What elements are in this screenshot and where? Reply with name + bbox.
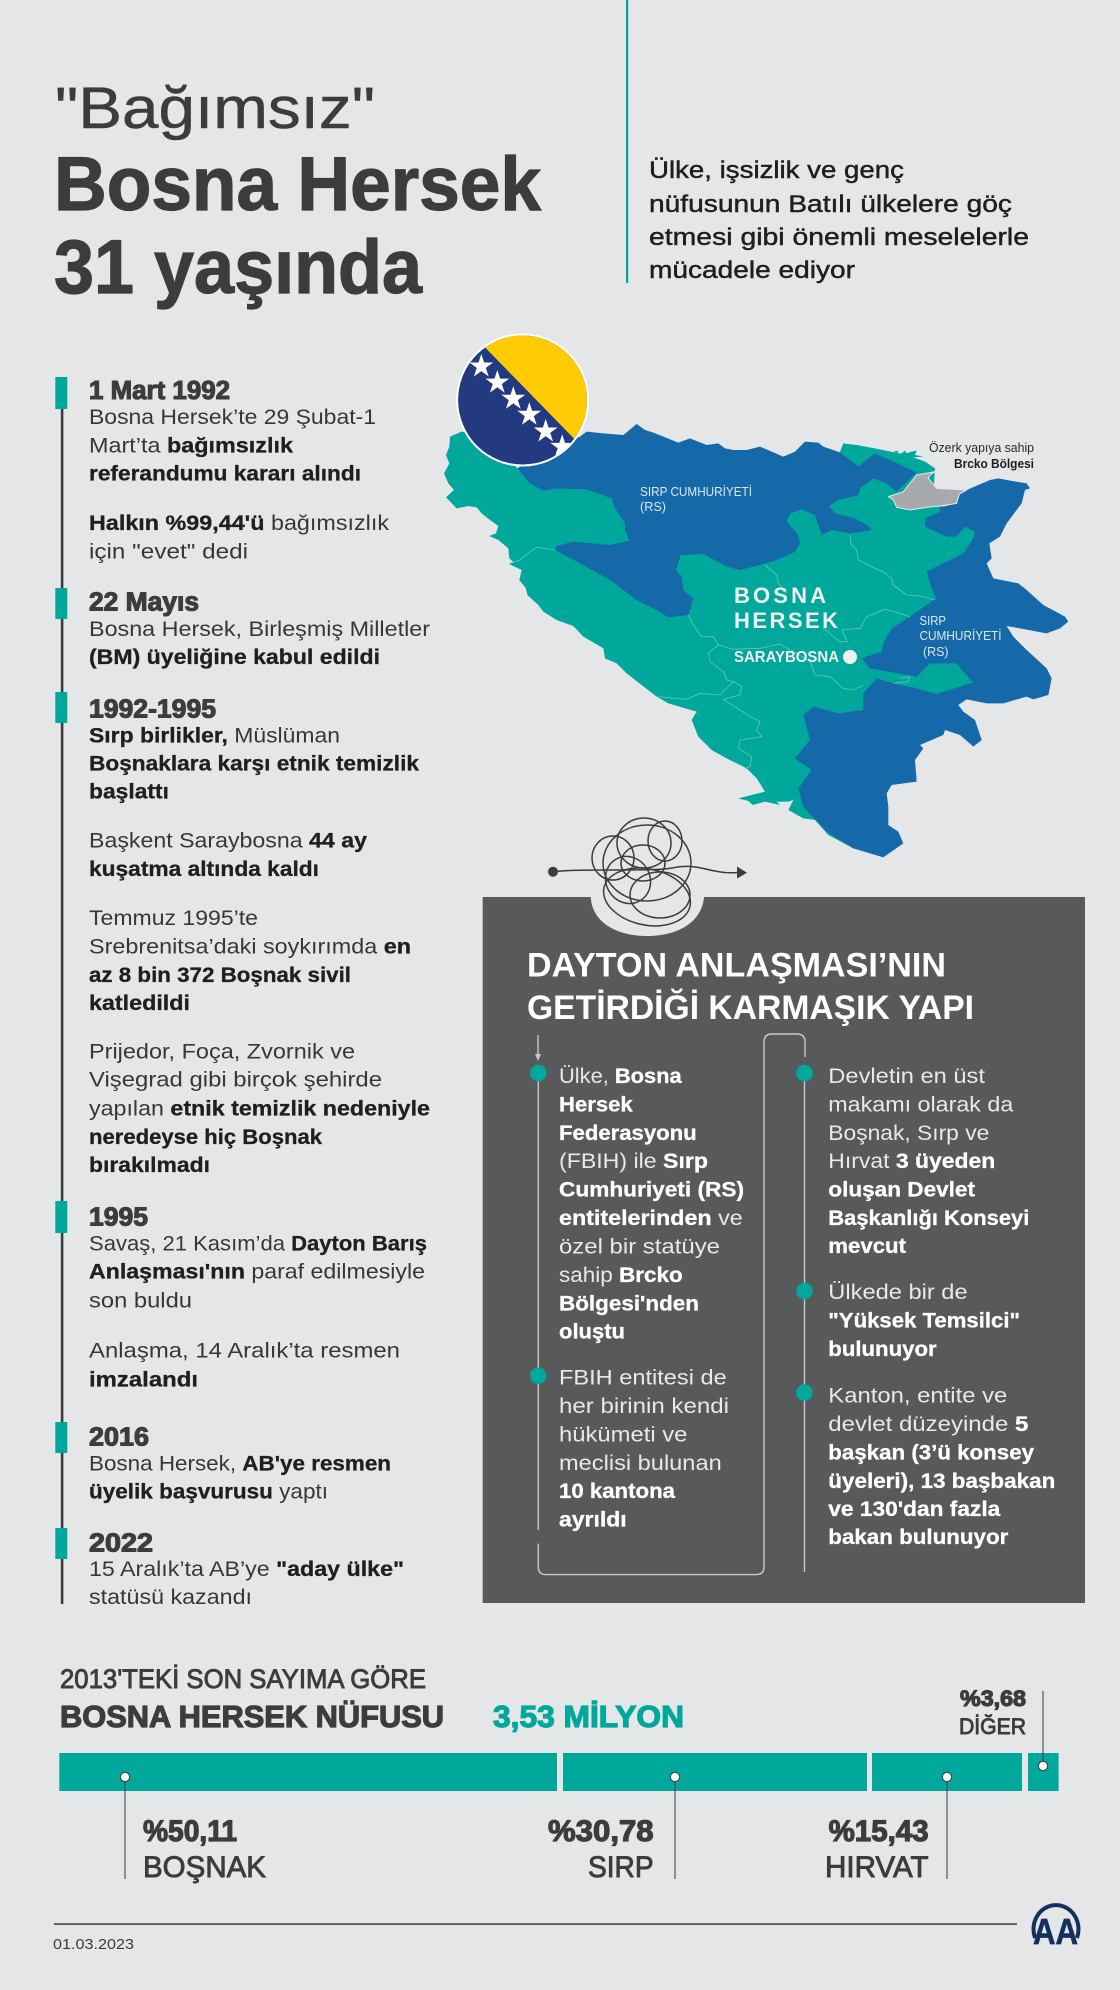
- entry: 1992-1995: Prijedor, Foça, Zvornik ve: [89, 1040, 355, 1064]
- panel: Dayton agreement: [483, 818, 1085, 1603]
- timeline marker 2016: [55, 1422, 67, 1453]
- timeline marker 22 Mayıs: [55, 588, 67, 619]
- icon: Bosnian flag: [455, 332, 591, 468]
- label: Diğer: %3,68: [960, 1686, 1026, 1711]
- panel text: presidency: Hırvat 3 üyeden: [828, 1150, 995, 1173]
- panel text: entities: özel bir statüye: [559, 1236, 720, 1258]
- population total: 3,53 MİLYON: [493, 1699, 684, 1734]
- entry: 1995: Anlaşması'nın paraf edilmesiyle: [89, 1260, 425, 1284]
- entry: 1 Mart 1992: Bosna Hersek’te 29 Şubat-1: [89, 405, 376, 429]
- entry: 2022: [89, 1530, 404, 1609]
- timeline marker 1992-1995: [55, 692, 67, 723]
- entry: 1992-1995: [89, 695, 430, 1177]
- panel text: presidency: oluşan Devlet: [828, 1179, 975, 1202]
- leader lines and dots: [120, 1691, 1048, 1879]
- entry: 22 Mayıs: (BM) üyeliğine kabul edildi: [89, 645, 380, 669]
- label: Boşnak: [143, 1815, 266, 1884]
- icon: tangled line with arrow: [548, 818, 747, 934]
- entry: 2016: 2016: [89, 1423, 149, 1451]
- entry: 1992-1995: Temmuz 1995’te: [89, 906, 258, 930]
- entry: 1992-1995: katledildi: [89, 991, 190, 1015]
- entry: 2016: Bosna Hersek, AB'ye resmen: [89, 1452, 391, 1476]
- panel text: entities: sahip Brcko: [559, 1264, 683, 1287]
- panel text: presidency: Başkanlığı Konseyi: [828, 1207, 1029, 1230]
- label: Hırvat: [825, 1815, 929, 1884]
- panel text: cantons: hükümeti ve: [559, 1423, 687, 1446]
- entry: 1992-1995: neredeyse hiç Boşnak: [89, 1125, 322, 1149]
- title: "Bağımsız": [55, 76, 375, 141]
- panel text: officials: [828, 1384, 1055, 1549]
- entry: 2022: statüsü kazandı: [89, 1585, 252, 1609]
- panel text: presidency: Boşnak, Sırp ve: [828, 1122, 989, 1145]
- panel text: officials: üyeleri), 13 başbakan: [828, 1470, 1055, 1493]
- map label: Saraybosna with dot: SARAYBOSNA: [734, 649, 839, 666]
- panel heading: GETİRDİĞİ KARMAŞIK YAPI: [527, 989, 974, 1027]
- entry: 1 Mart 1992: Mart’ta bağımsızlık: [89, 434, 293, 458]
- panel text: presidency: [828, 1065, 1029, 1258]
- entry: 1 Mart 1992: Halkın %99,44'ü bağımsızlık: [89, 511, 389, 535]
- panel text: entities: entitelerinden ve: [559, 1207, 743, 1230]
- label: Boşnak: BOŞNAK: [143, 1851, 266, 1884]
- entry: 2022: 15 Aralık’ta AB’ye "aday ülke": [89, 1557, 404, 1581]
- timeline marker 1995: [55, 1201, 67, 1233]
- small coastal details: [893, 451, 923, 457]
- label: Sırp: %30,78: [548, 1815, 654, 1848]
- panel text: cantons: meclisi bulunan: [559, 1452, 722, 1475]
- entry: 1992-1995: bırakılmadı: [89, 1153, 210, 1177]
- subtitle text block: mücadele ediyor: [649, 257, 855, 284]
- panel text: officials: devlet düzeyinde 5: [828, 1413, 1029, 1436]
- subtitle text block: Ülke, işsizlik ve genç: [649, 157, 904, 184]
- entry: 1992-1995: Boşnaklara karşı etnik temizlik: [89, 752, 419, 776]
- entry: 2016: üyelik başvurusu yaptı: [89, 1480, 328, 1504]
- panel heading: DAYTON ANLAŞMASI’NIN: [527, 947, 946, 985]
- map label: Sırp Cumhuriyeti east: [920, 613, 1002, 659]
- flow connector lines: [535, 1034, 805, 1575]
- map label: Brcko Bölgesi: Özerk yapıya sahip: [929, 441, 1034, 455]
- panel text: officials: ve 130'dan fazla: [828, 1498, 1001, 1521]
- panel text: officials: Kanton, entite ve: [828, 1384, 1007, 1408]
- panel text: presidency: Devletin en üst: [828, 1065, 985, 1088]
- panel text: presidency: mevcut: [828, 1235, 906, 1258]
- timeline marker 2022: [55, 1528, 67, 1559]
- map label: Sırp Cumhuriyeti west: SIRP CUMHURİYETİ: [640, 484, 752, 499]
- panel text: entities: (FBIH) ile Sırp: [559, 1150, 708, 1173]
- map label: Sırp Cumhuriyeti east: (RS): [923, 644, 948, 659]
- entry: 1995: [89, 1203, 427, 1392]
- entry: 1 Mart 1992: [89, 377, 389, 563]
- teal bullet dots: [530, 1065, 813, 1401]
- entry: 22 Mayıs: [89, 589, 430, 669]
- title: 31 yaşında: [54, 225, 423, 310]
- label: Boşnak: %50,11: [143, 1815, 237, 1848]
- teal vertical rule: [626, 0, 628, 283]
- panel text: entities: Cumhuriyeti (RS): [559, 1179, 744, 1202]
- entry: 1992-1995: 1992-1995: [89, 695, 216, 723]
- population heading: [60, 1663, 444, 1734]
- panel text: cantons: FBIH entitesi de: [559, 1367, 727, 1390]
- date: 01.03.2023: [53, 1936, 134, 1953]
- panel text: officials: bakan bulunuyor: [828, 1526, 1008, 1549]
- timeline: [55, 377, 430, 1609]
- entry: 1995: Savaş, 21 Kasım’da Dayton Barış: [89, 1232, 427, 1256]
- title: Bosna Hersek: [54, 142, 542, 227]
- entry: 1992-1995: Başkent Saraybosna 44 ay: [89, 828, 367, 852]
- entry: 1 Mart 1992: için "evet" dedi: [89, 539, 248, 563]
- panel text: cantons: [559, 1367, 729, 1531]
- map label: Brcko Bölgesi: Brcko Bölgesi: [954, 457, 1034, 471]
- map label: Bosna Hersek: HERSEK: [734, 608, 838, 633]
- label: Sırp: SIRP: [588, 1851, 654, 1884]
- entry: 1992-1995: az 8 bin 372 Boşnak sivil: [89, 963, 351, 987]
- entry: 1995: Anlaşma, 14 Aralık’ta resmen: [89, 1338, 400, 1362]
- map label: Sırp Cumhuriyeti west: [640, 484, 752, 514]
- map label: Sırp Cumhuriyeti west: (RS): [640, 499, 666, 514]
- map label: Brcko Bölgesi: [929, 441, 1034, 471]
- panel text: officials: başkan (3’ü konsey: [828, 1442, 1034, 1465]
- panel text: high representative: "Yüksek Temsilci": [828, 1310, 1020, 1332]
- entry: 1992-1995: yapılan etnik temizlik nedeniyle: [89, 1096, 430, 1120]
- panel text: cantons: her birinin kendi: [559, 1395, 729, 1418]
- panel text: high representative: bulunuyor: [828, 1338, 937, 1361]
- panel text: high representative: Ülkede bir de: [828, 1281, 968, 1304]
- label: Hırvat: HIRVAT: [825, 1851, 929, 1884]
- title: [54, 76, 542, 310]
- panel text: high representative: [828, 1281, 1020, 1361]
- entry: 1992-1995: Sırp birlikler, Müslüman: [89, 724, 340, 748]
- panel text: entities: [559, 1065, 744, 1344]
- subtitle text block: etmesi gibi önemli meselelerle: [649, 224, 1029, 251]
- map of Bosnia and Herzegovina: [444, 424, 1068, 857]
- population section: [59, 1663, 1059, 1884]
- entry: 1995: imzalandı: [89, 1368, 198, 1392]
- entry: 2016: [89, 1423, 391, 1504]
- panel text: entities: Hersek: [559, 1093, 633, 1116]
- map label: Sırp Cumhuriyeti east: CUMHURİYETİ: [920, 628, 1002, 643]
- panel text: cantons: 10 kantona: [559, 1480, 675, 1503]
- panel text: presidency: makamı olarak da: [828, 1093, 1014, 1116]
- entry: 22 Mayıs: 22 Mayıs: [89, 589, 199, 617]
- subtitle text block: nüfusunun Batılı ülkelere göç: [649, 191, 1012, 218]
- label: Sırp: [548, 1815, 654, 1884]
- subtitle text block: [649, 157, 1029, 284]
- map label: Bosna Hersek: BOSNA: [734, 583, 826, 608]
- population heading: BOSNA HERSEK NÜFUSU: [60, 1699, 444, 1734]
- entry: 1 Mart 1992: 1 Mart 1992: [89, 377, 230, 405]
- entry: 1992-1995: Srebrenitsa’daki soykırımda en: [89, 934, 411, 958]
- entry: 2022: 2022: [89, 1530, 153, 1558]
- footer rule: [54, 1923, 1017, 1925]
- map label: Bosna Hersek: [734, 583, 838, 633]
- entry: 1 Mart 1992: referandumu kararı alındı: [89, 462, 361, 486]
- timeline marker 1 Mart 1992: [55, 377, 67, 409]
- panel heading: [527, 947, 974, 1027]
- entry: 1992-1995: Vişegrad gibi birçok şehirde: [89, 1068, 382, 1092]
- segmented population bar: [59, 1753, 1059, 1791]
- entry: 1992-1995: başlattı: [89, 780, 169, 804]
- panel text: entities: Ülke, Bosna: [559, 1065, 682, 1088]
- map label: Sırp Cumhuriyeti east: SIRP: [920, 613, 946, 628]
- logo: AA: AA: [1033, 1911, 1078, 1952]
- label: Hırvat: %15,43: [829, 1815, 929, 1848]
- panel text: entities: Federasyonu: [559, 1122, 697, 1145]
- entry: 1995: 1995: [89, 1203, 148, 1231]
- label: Diğer: DİĞER: [959, 1714, 1026, 1739]
- label: Diğer: [959, 1686, 1026, 1739]
- entry: 1992-1995: kuşatma altında kaldı: [89, 857, 319, 881]
- population heading: 2013'TEKİ SON SAYIMA GÖRE: [60, 1663, 426, 1694]
- panel text: cantons: ayrıldı: [559, 1508, 627, 1531]
- panel text: entities: Bölgesi'nden: [559, 1292, 699, 1315]
- entry: 1995: son buldu: [89, 1288, 192, 1312]
- entry: 22 Mayıs: Bosna Hersek, Birleşmiş Milletler: [89, 617, 430, 641]
- panel text: entities: oluştu: [559, 1321, 625, 1344]
